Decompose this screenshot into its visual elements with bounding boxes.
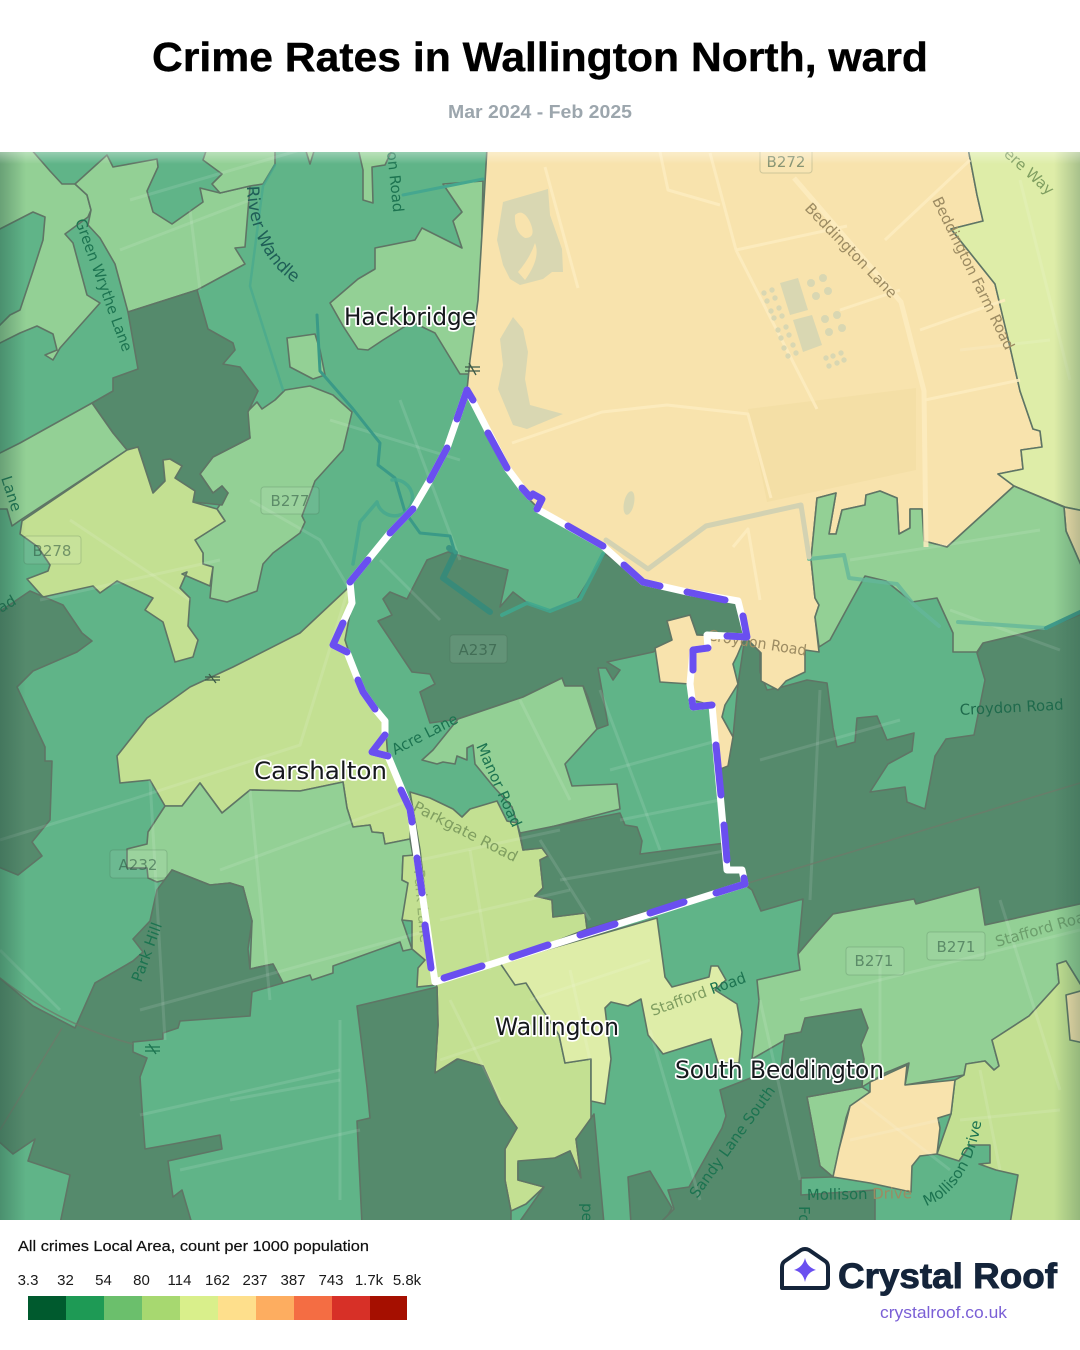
road shields: B272 (767, 153, 805, 171)
legend values: 743 (318, 1272, 344, 1289)
place label: South Beddington: South Beddington (675, 1056, 884, 1084)
legend values: 3.3 (18, 1272, 38, 1289)
road shields: B277 (271, 492, 309, 510)
road labels: Park Lane (410, 869, 434, 944)
ward boundary: Wallington North (333, 390, 747, 982)
map panel (0, 152, 1080, 1220)
lakes and sewage works (497, 189, 847, 516)
legend values: 237 (242, 1272, 268, 1289)
road labels (0, 152, 1080, 1220)
road labels: Croydon Road (706, 626, 808, 660)
road labels: Stafford Road (648, 969, 748, 1020)
peach area land use patch (748, 388, 916, 502)
river channels (250, 165, 1080, 628)
road labels: on Road (383, 151, 407, 213)
road labels: pe (578, 1203, 596, 1222)
icon: house with star (782, 1249, 828, 1288)
road shields: B271 (937, 938, 975, 956)
road shields: A232 (119, 856, 157, 874)
road labels: Acre Lane (389, 710, 461, 759)
road labels: Mollison Drive (807, 1184, 912, 1204)
legend values: 32 (57, 1272, 74, 1289)
legend values: 114 (168, 1272, 191, 1289)
legend values: 5.8k (393, 1272, 422, 1289)
title: Crime Rates in Wallington North, ward (152, 34, 928, 80)
website url: crystalroof.co.uk (880, 1304, 1008, 1322)
map edge shading (0, 152, 1080, 1220)
road labels: Fo (795, 1206, 813, 1223)
legend (18, 1238, 422, 1320)
legend values: 387 (280, 1272, 306, 1289)
peach area roads (512, 152, 1020, 600)
legend values: 162 (205, 1272, 230, 1289)
road shields: A237 (459, 641, 497, 659)
road labels: Green Wrythe Lane (71, 216, 136, 354)
road labels: Croydon Road (959, 696, 1064, 719)
road labels: Park Hill (128, 920, 166, 984)
road labels: Mollison Drive (922, 1121, 981, 1206)
station symbols (145, 363, 480, 1054)
road labels: River Wandle (247, 187, 298, 282)
road labels: ere Way (1000, 145, 1058, 199)
map roads (0, 150, 1080, 1200)
place label: Carshalton: Carshalton (254, 757, 387, 785)
place label: Wallington: Wallington (495, 1013, 619, 1041)
logo: Crystal Roof (782, 1249, 1057, 1322)
road labels: Parkgate Road (410, 798, 521, 866)
subtitle: date range: Mar 2024 - Feb 2025 (448, 102, 632, 122)
railway lines (0, 783, 1080, 1130)
legend colour scale (28, 1296, 407, 1320)
road shields (24, 146, 985, 975)
legend values (18, 1272, 422, 1289)
road labels: Beddington Farm Road (928, 194, 1018, 353)
crime-rate choropleth areas (0, 148, 1080, 1224)
logo wordmark: Crystal Roof (838, 1257, 1057, 1296)
road labels: Sandy Lane South (686, 1082, 779, 1201)
road shields: B271 (855, 952, 893, 970)
legend values: 1.7k (355, 1272, 384, 1289)
place label: Hackbridge: Hackbridge (344, 303, 476, 331)
legend values: 54 (95, 1272, 112, 1289)
legend values: 80 (133, 1272, 150, 1289)
road labels: Beddington Lane (801, 199, 901, 302)
road shields: B278 (33, 542, 71, 560)
legend title: All crimes Local Area, count per 1000 population (18, 1238, 369, 1255)
road labels: Manor Road (472, 740, 525, 830)
